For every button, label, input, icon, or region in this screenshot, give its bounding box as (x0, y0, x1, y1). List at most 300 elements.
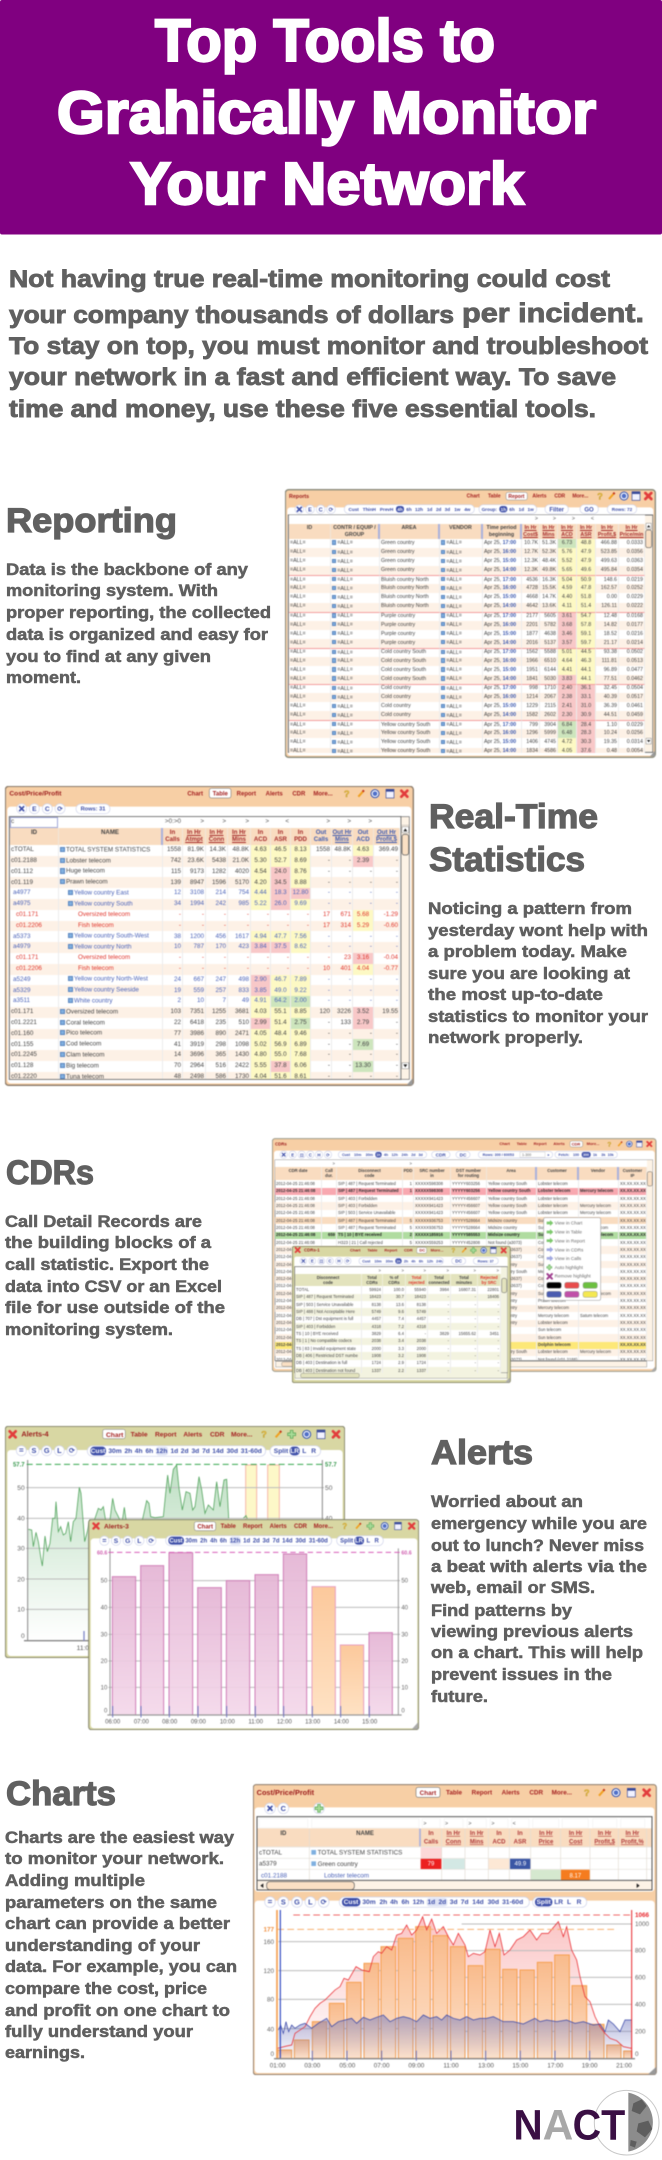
combined chart: bars, red line, blue line: 11:00 (443, 2063, 459, 2070)
body: reporting: you to find at any given (6, 648, 211, 666)
charts window chrome: Table (446, 1789, 463, 1796)
reports data table: ID (307, 525, 312, 531)
CDR records table: PDD (404, 1168, 412, 1173)
CDRs-1 summary table: SIP | 488 | Not Acceptable Here (296, 1309, 355, 1314)
cost data table: 34.5 (274, 879, 287, 886)
reports data table: Apr 25, 17:00 (484, 577, 516, 583)
reports data table: =ALL= (446, 586, 462, 592)
reports data table: 4638 (544, 631, 556, 637)
cost data table: - (370, 976, 372, 983)
reports window chrome and toolbar: More... (572, 494, 589, 500)
reports data table: =ALL= (446, 658, 462, 664)
CDR records table: 2012-04-25 21:46:08 (276, 1269, 315, 1274)
CDRs-1 summary table: 3829 (372, 1331, 381, 1336)
body: real-time statistics: a problem today. Make (428, 943, 627, 961)
summary table: 79 (428, 1862, 435, 1868)
CDR records table: Prawn telecom (538, 1298, 566, 1303)
CDRs window chrome and toolbar: 10k (608, 1153, 615, 1157)
reports data table: > (553, 516, 556, 522)
reports data table: Apr 25, 16:00 (484, 730, 516, 736)
cost data table: 4.63 (254, 846, 267, 853)
CDRs window chrome and toolbar: 12h (392, 1153, 398, 1157)
cost data table: - (247, 965, 249, 972)
reports data table: 2177 (526, 613, 538, 619)
reports data table: Bluish country North (381, 603, 429, 609)
CDRs-1 summary table: 2.2 (398, 1368, 404, 1372)
reports data table: =ALL= (290, 739, 306, 745)
reports data table: 0.0214 (627, 640, 643, 646)
CDRs-1 summary table: 100.0 (394, 1287, 404, 1292)
cost data table: TOTAL SYSTEM STATISTICS (66, 847, 150, 854)
reports data table: 4642 (526, 603, 538, 609)
bar chart: Alerts-3: 10 (401, 1685, 409, 1691)
CDR records table: XX.XX.XX.XX (620, 1335, 646, 1340)
bar chart: Alerts-3: 10:00 (220, 1719, 236, 1725)
cost data table: 13.30 (355, 1062, 371, 1069)
CDR records table: SIP | 403 | Forbidden (338, 1327, 377, 1332)
CDR records table: Sun telecom (538, 1327, 561, 1332)
menu items: View in Table (555, 1230, 582, 1235)
cost data table: Mins (232, 836, 246, 843)
combined chart: bars, red line, blue line: 120 (263, 1968, 274, 1975)
body: charts: and profit on one chart to (5, 2002, 230, 2020)
CDR records table: XX.XX.XX.XX (620, 1232, 646, 1237)
cost data table: - (307, 911, 309, 918)
reports data table: Cold country (381, 685, 411, 691)
reports window chrome and toolbar: Filter (549, 507, 565, 513)
cost data table: - (287, 911, 289, 918)
cost data table: 6.06 (294, 1062, 307, 1069)
intro paragraph: To stay on top, you must monitor and troubleshoot (9, 333, 648, 360)
cost data table: 17 (323, 911, 330, 918)
cost data table: 10 (197, 997, 204, 1004)
CDRs-1 summary table: - (498, 1309, 499, 1314)
CDRs-1 summary table: - (448, 1309, 449, 1314)
CDR records table: XXXXX941423 (415, 1203, 443, 1208)
CDR records table: 2012-04-25 21:46:08 (276, 1349, 315, 1354)
cost data table: - (267, 965, 269, 972)
reports window chrome and toolbar: 6h (406, 507, 412, 512)
menu items: View in CDRs (555, 1247, 584, 1252)
reports window chrome and toolbar: 3d (445, 507, 450, 512)
summary table: cTOTAL (259, 1849, 282, 1856)
reports data table: =ALL= (290, 649, 306, 655)
CDR records table: Midsize country (488, 1232, 520, 1237)
reports data table: 50.9 (581, 577, 591, 583)
cost data table: - (287, 922, 289, 929)
body: real-time statistics: Noticing a pattern from (428, 900, 632, 918)
charts window chrome: Chart (420, 1790, 437, 1797)
body: cdrs: call statistic. Export the (5, 1256, 209, 1274)
CDR records table: XX.XX.XX.XX (620, 1240, 646, 1245)
reports data table: 499.63 (601, 558, 617, 564)
reports data table: =ALL= (290, 577, 306, 583)
cost data table: - (247, 922, 249, 929)
chart toolbar: 2d (438, 1899, 446, 1906)
CDR records table: XXXXX598308 (415, 1181, 443, 1186)
cost data table: Calls (165, 836, 180, 843)
CDRs-1 summary table: 3.3 (398, 1346, 404, 1351)
reports data table: Cold country South (381, 667, 426, 673)
cost data table: - (396, 976, 398, 983)
cost data table: a4975 (13, 900, 31, 907)
cost data table: 4.04 (357, 965, 369, 972)
bar chart: Alerts-3: 50 (401, 1579, 409, 1585)
body: alerts (430, 1493, 647, 1706)
combined chart: bars, red line, blue line (263, 1910, 656, 2074)
CDRs-1 summary table: > (497, 1268, 499, 1273)
menu items (542, 1216, 602, 1302)
CDRs-1 summary table: - (475, 1302, 476, 1307)
reports data table: 2201 (526, 622, 538, 628)
reports data table: =ALL= (337, 740, 353, 746)
cost window chrome and toolbar: Alerts (266, 791, 283, 797)
reports data table: =ALL= (446, 631, 462, 637)
CDRs-1 window chrome and toolbar: 4h (411, 1259, 415, 1263)
reports data table: =ALL= (290, 676, 306, 682)
line chart: Alerts-4: 40 (325, 1516, 333, 1523)
CDR records table: SRC number (419, 1168, 445, 1173)
section: alerts text (430, 1434, 647, 1706)
CDRs-1 summary table: 3829 (440, 1331, 449, 1336)
CDR records table: YYYYY456607 (452, 1210, 480, 1215)
cost data table: Mins (335, 836, 349, 843)
title banner (0, 0, 662, 234)
cost data table: 2964 (190, 1062, 204, 1069)
reports data table: 44.5 (581, 649, 591, 655)
cost data table: 4.94 (254, 933, 267, 940)
CDR records table: 2012-04-25 21:46:08 (276, 1210, 315, 1215)
reports data table: 10.7K (524, 540, 538, 546)
Alerts-3 window chrome: Alerts (270, 1524, 287, 1530)
summary table (257, 1817, 652, 1890)
reports data table: 1582 (526, 712, 538, 718)
CDR records table: SIP | 403 | Forbidden (338, 1320, 377, 1325)
cost data table: - (328, 879, 330, 886)
reports window chrome and toolbar: 4w (464, 507, 471, 512)
reports data table: =ALL= (446, 722, 462, 728)
CDR records table: in (430, 1173, 434, 1178)
CDR records table: XX.XX.XX.XX (620, 1349, 646, 1354)
section: real-time statistics text (428, 798, 649, 1047)
CDR records table: XX.XX.XX.XX (620, 1342, 646, 1347)
heading: alerts: Alerts (431, 1434, 533, 1472)
reports data table: 5.04 (562, 577, 572, 583)
reports data table: 0.0219 (627, 577, 643, 583)
bar chart: Alerts-3: 08:00 (162, 1719, 178, 1725)
chart toolbar: Cust (344, 1899, 359, 1906)
summary table: > (468, 1821, 471, 1827)
reports data table: 1951 (526, 667, 538, 673)
reports data table: 799 (529, 722, 538, 728)
CDR records table: SIP | 403 | Forbidden (338, 1313, 377, 1318)
reports data table: 0.0229 (627, 722, 643, 728)
cost data table: 46.7 (274, 976, 287, 983)
Alerts-3 window chrome: 14d (282, 1539, 293, 1545)
CDR records table: XX.XX.XX.XX (620, 1291, 646, 1296)
cost data table: - (287, 954, 289, 961)
reports window chrome and toolbar: Alerts (532, 494, 547, 500)
Alerts-3 window chrome: ⟳ (149, 1538, 155, 1545)
reports window chrome and toolbar: CDR (554, 494, 566, 500)
CDR records table: 5 (410, 1225, 412, 1230)
CDR records table: 2012-04-25 21:46:08 (276, 1298, 315, 1303)
Alerts-4 window chrome: 12h (156, 1448, 167, 1455)
body: alerts: future. (431, 1688, 488, 1706)
CDR records table: SIP | 403 | Forbidden (338, 1254, 377, 1259)
cost data table: >0:>0 (165, 818, 181, 825)
cost data table: - (247, 954, 249, 961)
CDRs window chrome and toolbar: 1k (593, 1153, 598, 1157)
CDR records table: 2012-04-25 21:46:08 (276, 1232, 315, 1237)
combined chart: bars, red line, blue line: 400 (635, 2002, 646, 2009)
cost data table: c01.171 (16, 954, 38, 961)
reports data table: Apr 25, 14:00 (484, 640, 516, 646)
CDRs window chrome and toolbar: ⟳ (326, 1152, 330, 1157)
window: CDRs-1 sub-window (291, 1245, 512, 1384)
summary table: In (496, 1831, 502, 1837)
chart toolbar: L (567, 1899, 571, 1906)
chart toolbar: 1d (427, 1899, 435, 1906)
reports data table: 5782 (544, 622, 556, 628)
cost data table: - (396, 868, 398, 875)
CDR records table: DST number (456, 1168, 481, 1173)
CDRs-1 summary table: - (498, 1346, 499, 1351)
reports data table: =ALL= (337, 667, 353, 673)
cost data table: 3226 (337, 1008, 351, 1015)
cost data table: 6.89 (294, 1041, 307, 1048)
CDR records table: Lobster telecom (538, 1203, 568, 1208)
reports data table: In Hr (580, 525, 592, 531)
reports data table: 1.10 (607, 722, 617, 728)
CDRs-1 window chrome and toolbar: 1h (396, 1259, 400, 1263)
reports data table: Green country (381, 549, 415, 555)
CDRs-1 summary table: 4457 (372, 1316, 381, 1321)
CDRs-1 summary table: 18406 (487, 1294, 499, 1299)
reports data table: Cold country (381, 694, 411, 700)
title text: Top Tools to (155, 8, 495, 74)
reports data table: 14.82 (604, 622, 617, 628)
CDRs-1 window chrome and toolbar: C (328, 1259, 332, 1264)
line chart: Alerts-4: 40 (17, 1516, 25, 1523)
cost data table: 120 (319, 1008, 330, 1015)
CDR records table: 2012-04-25 21:46:08 (276, 1276, 315, 1281)
CDR records table: 2012-04-25 21:46:08 (276, 1181, 315, 1186)
reports data table: 59.1 (581, 631, 591, 637)
cost window chrome and toolbar: Chart (187, 791, 203, 797)
charts window chrome: Report (472, 1789, 493, 1796)
CDRs window chrome and toolbar: 2d (411, 1153, 415, 1157)
CDR records table: Midsize country (488, 1218, 517, 1223)
body: charts: to monitor your network. (5, 1850, 224, 1868)
CDRs-1 summary table: 2038 (417, 1338, 426, 1343)
cost data table: 1098 (235, 1041, 249, 1048)
summary table: 8.17 (569, 1873, 582, 1879)
reports data table: Apr 25, 17:00 (484, 540, 516, 546)
body: alerts: prevent issues in the (431, 1666, 612, 1684)
CDRs window chrome and toolbar: CDR (572, 1141, 580, 1146)
bar chart: Alerts-3: 06:00 (105, 1719, 121, 1725)
CDRs-1 summary table: 1908 (372, 1353, 381, 1358)
CDRs-1 summary table: % of (390, 1275, 398, 1280)
reports window chrome and toolbar (284, 488, 657, 759)
window: CDRs screenshot (271, 1138, 658, 1372)
reports data table: Apr 25, 15:00 (484, 667, 516, 673)
reports data table: Mins (542, 532, 555, 538)
cost data table: - (267, 954, 269, 961)
cost data table: Pico telecom (66, 1030, 102, 1037)
reports window chrome and toolbar: E (308, 507, 312, 513)
cost data table: > (200, 818, 204, 825)
CDR records table: 2012-04-25 21:46:08 (276, 1283, 315, 1288)
reports data table: In Hr (542, 525, 555, 531)
cost data table: 1200 (190, 933, 204, 940)
cost data table: In (258, 829, 263, 836)
reports data table: Price/min (620, 532, 643, 538)
cost data table: 298 (215, 1041, 226, 1048)
reports data table: 2602 (544, 712, 556, 718)
CDR records table: Sun telecom (538, 1218, 561, 1223)
cost data table: - (179, 954, 181, 961)
window: charts cost price profit (252, 1783, 658, 2076)
CDRs-1 summary table: - (498, 1353, 499, 1358)
reports data table: =ALL= (337, 713, 353, 719)
reports data table: 0.0216 (627, 631, 643, 637)
body: cdrs: the building blocks of a (5, 1234, 212, 1252)
CDRs-1 window chrome and toolbar: DC (419, 1248, 425, 1253)
CDR records table: Call (325, 1168, 333, 1173)
combined chart: bars, red line, blue line: 177 (263, 1927, 274, 1934)
CDR records table: SIP | 403 | Forbidden (338, 1283, 377, 1288)
cost data table: - (328, 900, 330, 907)
CDR records table (274, 1159, 647, 1360)
Alerts-4 window chrome: = (19, 1446, 24, 1455)
CDR records table: YYYYY585553 (452, 1232, 480, 1237)
bar chart: Alerts-3: 50 (101, 1579, 108, 1585)
CDR records table: 2012-04-25 21:46:08 (276, 1254, 315, 1259)
reports window chrome and toolbar: C (319, 507, 323, 513)
CDR records table: Yellow country South (488, 1203, 527, 1208)
cost data table: - (370, 900, 372, 907)
window: cost price profit table screenshot (4, 785, 415, 1087)
cost data table: - (396, 1019, 398, 1026)
body: alerts: Find patterns by (431, 1602, 573, 1620)
CDRs window chrome and toolbar: 10m (354, 1153, 362, 1157)
CDRs-1 summary table: - (448, 1346, 449, 1351)
cost data table: 46.5 (274, 846, 287, 853)
CDR records table: XX.XX.XX.XX (620, 1269, 646, 1274)
CDR records table: XX.XX.XX.XX (620, 1276, 646, 1281)
reports data table: 6144 (544, 667, 556, 673)
cost data table: ACD (356, 836, 370, 843)
CDRs window chrome and toolbar: ▸ (548, 1153, 550, 1157)
cost data table: 456 (215, 933, 226, 940)
cost data table: - (349, 997, 351, 1004)
CDRs-1 summary table: 8138 (417, 1302, 426, 1307)
cost data table: - (349, 879, 351, 886)
reports data table: =ALL= (446, 613, 462, 619)
cost data table: - (349, 900, 351, 907)
CDR records table: 2012-04-25 21:46:08 (276, 1313, 315, 1318)
reports window chrome and toolbar: ⟳ (329, 507, 334, 513)
Alerts-3 window chrome (89, 1520, 419, 1730)
CDRs-1 summary table: - (448, 1360, 449, 1365)
Alerts-3 window chrome: 3d (262, 1539, 270, 1545)
cost data table: ACD (254, 836, 267, 843)
cost data table: PDD (294, 836, 307, 843)
cost data table: - (349, 889, 351, 896)
CDRs-1 summary table: - (498, 1302, 499, 1307)
reports data table: 44.1 (581, 676, 591, 682)
summary table: a5379 (259, 1861, 277, 1868)
CDRs-1 window chrome and toolbar: DC (455, 1259, 463, 1264)
cost data table: - (328, 1019, 330, 1026)
reports data table: 47.8 (581, 585, 591, 591)
CDRs-1 summary table: 7.4 (398, 1316, 404, 1321)
cost data table: - (328, 889, 330, 896)
reports data table: 48.8 (581, 540, 591, 546)
cost data table: - (179, 922, 181, 929)
reports data table: =ALL= (290, 640, 306, 646)
reports data table: =ALL= (446, 550, 462, 556)
CDR records table: YYYYY603256 (452, 1181, 480, 1186)
reports data table: > (535, 516, 538, 522)
CDR records table: YYYYY528664 (452, 1218, 480, 1223)
cost data table: 23 (344, 954, 351, 961)
cost data table: c01.171 (16, 911, 38, 918)
reports data table: Apr 25, 17:00 (484, 722, 516, 728)
CDRs-1 summary table: SIP | 487 | Request Terminated (296, 1294, 354, 1299)
cost data table: 24.0 (274, 868, 287, 875)
CDR records table: SIP | 403 | Forbidden (338, 1203, 377, 1208)
reports data table: 1562 (526, 649, 538, 655)
cost data table: - (224, 911, 226, 918)
reports window chrome and toolbar: 1w (454, 507, 461, 512)
CDR records table: XX.XX.XX.XX (620, 1203, 646, 1208)
CDR records table: Midsize country (488, 1262, 517, 1266)
Alerts-3 window chrome: CDR (294, 1524, 308, 1530)
cost data table: - (370, 987, 372, 994)
reports data table: =ALL= (446, 540, 462, 546)
CDR records table: 1 (410, 1181, 412, 1186)
CDR records table: SIP | 403 | Forbidden (338, 1247, 377, 1252)
bar chart: Alerts-3: 15:00 (362, 1719, 378, 1725)
combined chart: bars, red line, blue line: 21:00 (616, 2063, 632, 2070)
CDR records table: Dolphin telecom (538, 1342, 571, 1347)
Alerts-3 window chrome: 12h (230, 1539, 241, 1545)
CDR records table: YYYYY456607 (452, 1196, 480, 1201)
chart toolbar (265, 1897, 587, 1907)
cost data table: 369.49 (379, 846, 398, 853)
combined chart: bars, red line, blue line: 07:00 (374, 2063, 390, 2070)
CDR records table: XX.XX.XX.XX (620, 1305, 646, 1310)
CDRs-1 summary table: - (475, 1353, 476, 1358)
reports data table: =ALL= (337, 604, 353, 610)
body: real-time statistics: sure you are looking at (428, 965, 631, 983)
body: reporting: data is organized and easy for (6, 626, 269, 644)
cost data table: 401 (340, 965, 351, 972)
summary table: ACD (492, 1839, 506, 1845)
CDR records table: XXXXX936753 (415, 1225, 443, 1230)
cost data table: - (224, 965, 226, 972)
intro paragraph: your network in a fast and efficient way. To save (9, 364, 616, 391)
chart toolbar: 12h (413, 1899, 424, 1906)
CDR records table: Coral telecom (538, 1276, 564, 1281)
reports data table: =ALL= (290, 540, 306, 546)
cost data table: 70 (174, 1062, 181, 1069)
reports data table: Apr 25, 16:00 (484, 549, 516, 555)
line chart: Alerts-4: 50 (325, 1485, 333, 1492)
